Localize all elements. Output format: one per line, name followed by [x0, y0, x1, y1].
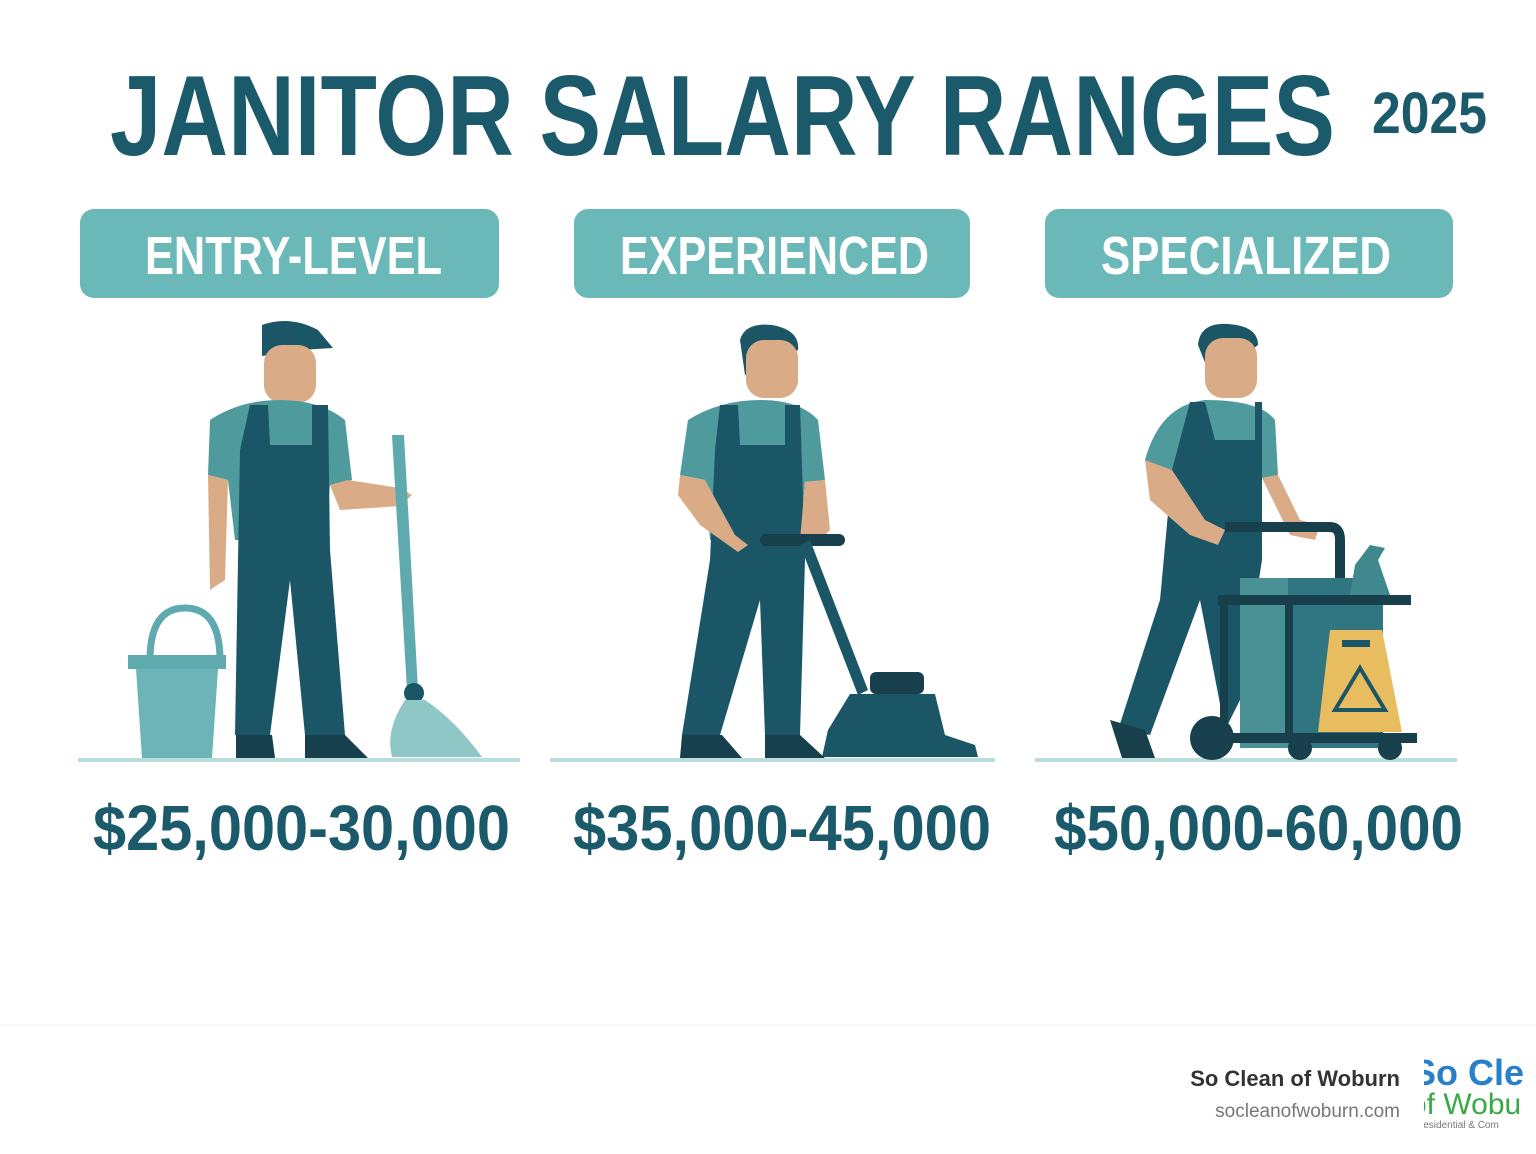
label: specialized	[1045, 209, 1453, 298]
footer credit: socleanofwoburn.com	[1215, 1101, 1400, 1122]
label: experienced: EXPERIENCED	[620, 226, 929, 286]
footer credit: So Clean of Woburn	[1190, 1066, 1400, 1091]
price: entry-level: $25,000-30,000	[93, 792, 510, 864]
label: entry-level	[80, 209, 499, 298]
title: 2025	[1372, 81, 1487, 146]
logo: So Cle	[1412, 1052, 1524, 1093]
illustration: janitor with mop and bucket	[78, 321, 520, 762]
label: entry-level: ENTRY-LEVEL	[145, 226, 442, 286]
illustration: janitor with cleaning cart	[1035, 324, 1457, 762]
illustration: janitor with floor polisher	[550, 325, 995, 762]
price: specialized: $50,000-60,000	[1054, 792, 1463, 864]
label: specialized: SPECIALIZED	[1101, 226, 1391, 286]
logo	[1400, 1045, 1524, 1135]
label: experienced	[574, 209, 970, 298]
price: experienced: $35,000-45,000	[573, 792, 991, 864]
logo: of Wobu	[1410, 1088, 1521, 1121]
footer credit	[1190, 1066, 1400, 1122]
logo: Residential & Com	[1416, 1120, 1499, 1131]
